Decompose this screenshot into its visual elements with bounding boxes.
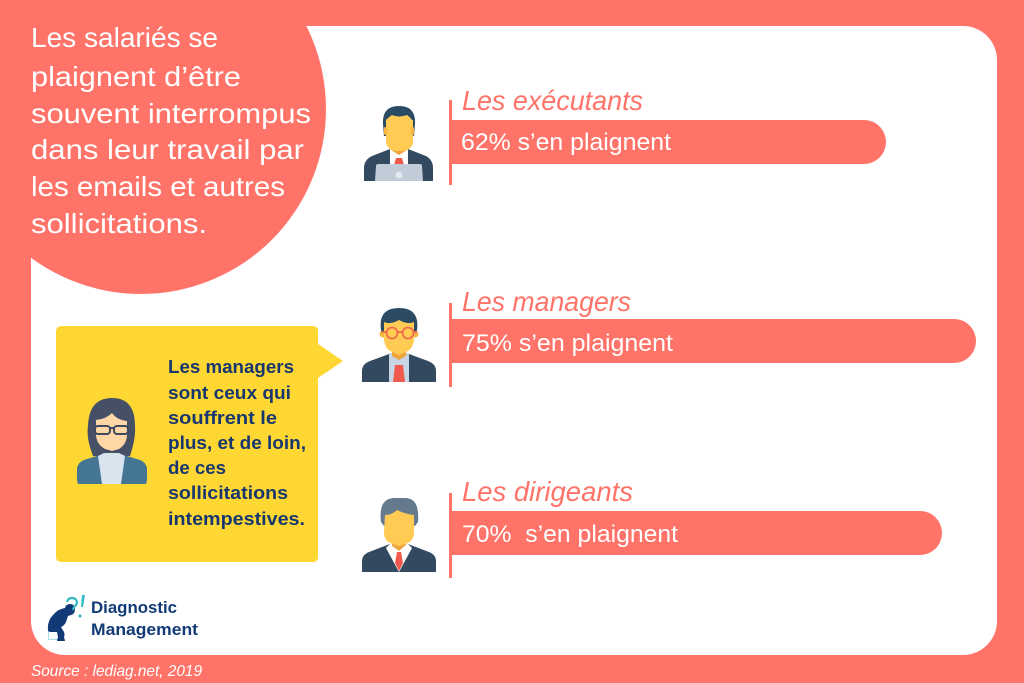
bar [451,120,886,164]
divider [449,493,452,578]
callout text: intempestives. [168,508,305,529]
logo [48,595,199,641]
logo text: Management [91,621,199,639]
corner circle: intro [0,0,326,294]
row: les exécutants [364,85,886,185]
logo text [91,599,199,639]
intro text: plaignent d’être [31,61,241,92]
bar [451,511,942,555]
icon: executive [362,498,436,572]
icon: manager with glasses [362,308,436,382]
row: les managers [362,286,976,387]
intro text: Les salariés se [31,22,218,53]
callout text: sollicitations [168,482,288,503]
label: Les dirigeants [462,476,633,507]
icon: employee with laptop [364,106,433,181]
callout text: plus, et de loin, [168,432,306,453]
callout text: sont ceux qui [168,382,291,403]
row: les dirigeants [362,476,942,578]
value: 62% s’en plaignent [461,129,671,156]
source: Source : lediag.net, 2019 [31,663,202,680]
intro text: sollicitations. [31,208,207,239]
callout box with pointer [56,326,343,562]
callout [56,326,343,562]
callout text [168,356,306,529]
logo text: Diagnostic [91,599,177,617]
intro text: dans leur travail par [31,134,304,165]
divider [449,100,452,185]
icon: thinker [48,595,85,641]
divider [449,303,452,387]
intro text [31,22,311,239]
label: Les exécutants [462,85,643,116]
callout text: souffrent le [168,407,277,428]
label: Les managers [462,286,631,317]
callout text: Les managers [168,356,294,377]
intro text: souvent interrompus [31,98,311,129]
value: 70% s’en plaignent [462,521,678,548]
bar [451,319,976,363]
intro text: les emails et autres [31,171,285,202]
icon: woman with glasses [77,398,147,484]
value: 75% s’en plaignent [462,330,673,357]
callout text: de ces [168,457,226,478]
